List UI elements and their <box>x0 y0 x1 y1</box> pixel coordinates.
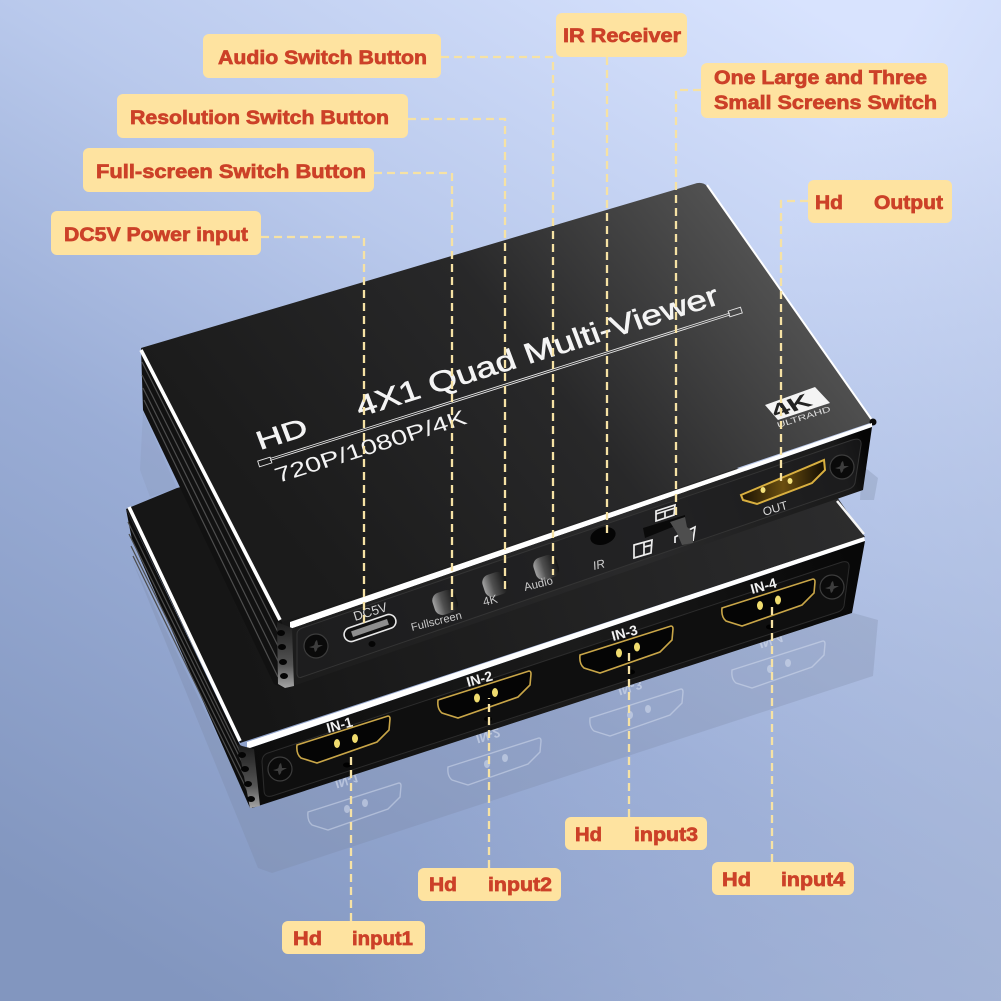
device reflection <box>132 412 878 873</box>
port: IN-1 <box>297 714 390 768</box>
label: Hd input1 <box>282 921 425 954</box>
4K ultra HD logo <box>765 387 832 430</box>
icon: layout right <box>675 527 695 543</box>
leader: input2 <box>488 698 490 868</box>
label: One Large and Three Small Screens Switch: One Large and Three <box>714 67 927 89</box>
label: Hd input2 <box>418 868 561 901</box>
leader: resolution <box>408 119 505 592</box>
4K ultra HD logo: ULTRAHD <box>776 405 832 430</box>
label: Hd Output: Hd <box>815 192 843 214</box>
device reflection: IN-2 <box>474 725 502 746</box>
lower device top face <box>126 400 865 743</box>
port: IN-1: IN-1 <box>325 714 355 736</box>
label: Hd Output: Output <box>874 192 944 214</box>
leader: IR <box>606 57 608 535</box>
port: IN-3 <box>580 622 673 674</box>
label: Hd input4: input4 <box>781 869 845 891</box>
label: Hd Output <box>808 180 952 223</box>
IR receiver: IR <box>591 556 607 573</box>
button: 4K <box>480 570 510 609</box>
label: One Large and Three Small Screens Switch: Small Screens Switch <box>714 92 937 114</box>
DC5V USB-C port: DC5V <box>351 599 389 624</box>
port: IN-3: IN-3 <box>610 622 640 644</box>
upper device edges <box>141 185 876 629</box>
DC5V USB-C port <box>342 599 398 647</box>
upper device screws <box>304 455 854 658</box>
text: HD: HD <box>252 413 312 456</box>
label: Hd input2: input2 <box>488 874 552 896</box>
leader: DC5V <box>261 237 364 623</box>
leader: input4 <box>771 607 773 862</box>
label: Hd input3 <box>565 817 707 850</box>
label: Resolution Switch Button: Resolution Switch Button <box>130 107 389 129</box>
leader: full-screen <box>374 173 452 612</box>
label: Resolution Switch Button <box>117 94 408 138</box>
printed branding <box>252 280 742 488</box>
upper device side fins <box>141 348 284 688</box>
leader lines <box>261 57 808 921</box>
port: IN-4: IN-4 <box>749 575 779 597</box>
IR receiver <box>588 524 618 573</box>
label: Audio Switch Button: Audio Switch Button <box>218 47 427 69</box>
button: audio: Audio <box>523 575 554 594</box>
lower device side fins <box>126 509 250 808</box>
upper device: multi-viewer <box>141 183 876 688</box>
button: fullscreen <box>410 588 463 634</box>
label: DC5V Power input: DC5V Power input <box>64 224 249 246</box>
lower device white edges <box>129 501 865 749</box>
label: Hd input4: Hd <box>722 869 751 891</box>
button: audio <box>523 553 561 594</box>
label: Hd input1: Hd <box>293 928 322 950</box>
text: 720P/1080P/4K: 720P/1080P/4K <box>271 405 471 488</box>
4K ultra HD logo: 4K <box>766 390 817 422</box>
button: fullscreen: Fullscreen <box>410 610 463 634</box>
label: Full-screen Switch Button: Full-screen Switch Button <box>96 161 366 183</box>
upper device top face <box>141 183 873 622</box>
lower device screws <box>268 575 844 781</box>
label: Full-screen Switch Button <box>83 148 374 192</box>
device reflection: IN-3 <box>616 677 644 698</box>
label: DC5V Power input <box>51 211 261 255</box>
switch knob <box>670 517 693 545</box>
device reflection: IN-1 <box>333 770 361 791</box>
lower device: input unit <box>126 400 865 808</box>
icon: layout top <box>656 505 675 521</box>
leader: input3 <box>628 653 630 817</box>
HDMI output port: OUT <box>761 498 789 519</box>
layout switch <box>634 505 695 558</box>
port: IN-4 <box>722 575 815 630</box>
icon: layout left <box>634 540 652 558</box>
leader: screens switch <box>676 90 701 520</box>
leader: audio <box>441 57 553 575</box>
port: IN-2: IN-2 <box>465 668 495 690</box>
label: IR Receiver: IR Receiver <box>563 25 681 47</box>
HDMI output port <box>741 460 825 519</box>
port: IN-2 <box>438 668 531 722</box>
device reflection: IN-4 <box>757 630 786 651</box>
button: 4K: 4K <box>481 592 499 609</box>
lower device front panel <box>238 541 865 808</box>
leader: input1 <box>350 753 352 921</box>
cable line <box>258 307 742 467</box>
label: Audio Switch Button <box>203 34 441 78</box>
upper device front panel <box>277 427 872 688</box>
label: Hd input1: input1 <box>352 928 413 950</box>
label: Hd input3: input3 <box>634 824 698 846</box>
label: IR Receiver <box>556 13 687 57</box>
label: Hd input2: Hd <box>429 874 457 896</box>
label: Hd input4 <box>712 862 854 895</box>
leader: output <box>781 201 808 485</box>
label: Hd input3: Hd <box>575 824 602 846</box>
text: 4X1 Quad Multi-Viewer: 4X1 Quad Multi-Viewer <box>351 280 724 423</box>
label: One Large and Three Small Screens Switch <box>701 63 948 118</box>
